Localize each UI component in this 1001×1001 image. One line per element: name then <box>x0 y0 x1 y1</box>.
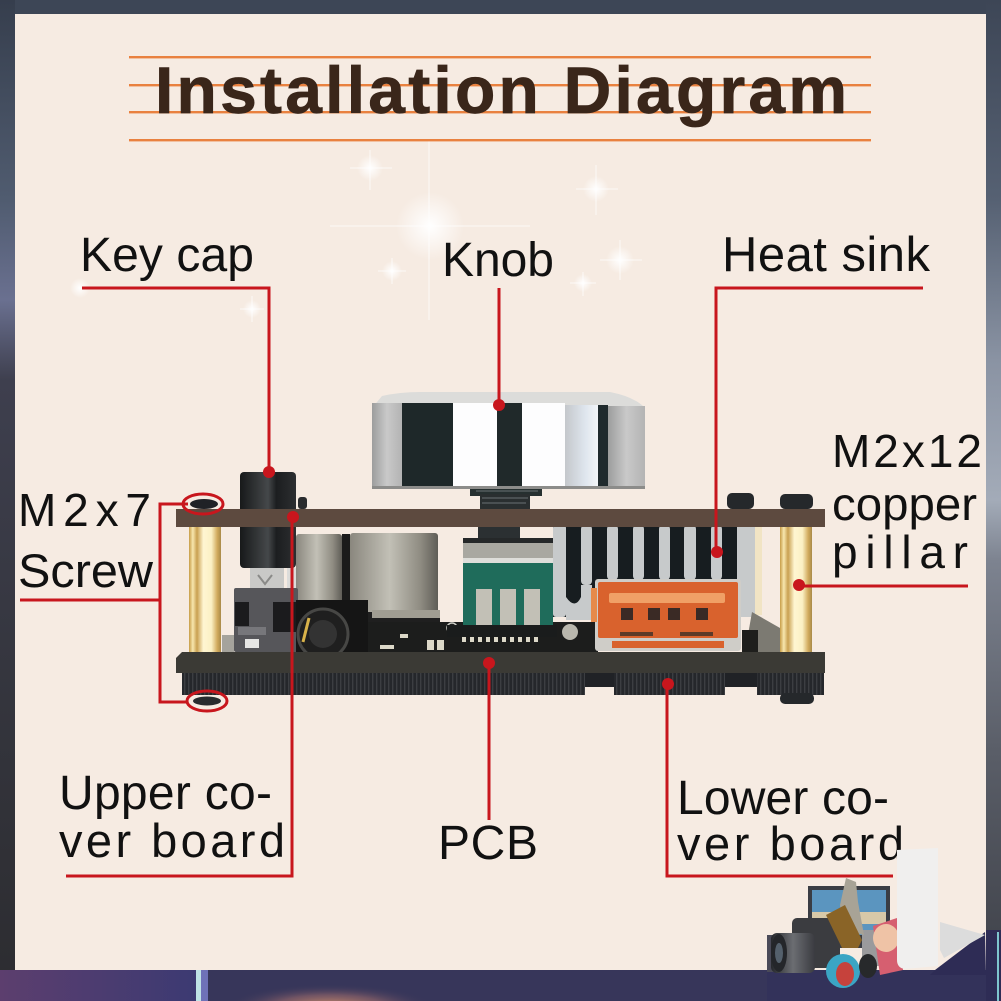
labels: ver board <box>59 814 285 867</box>
switch <box>222 588 298 652</box>
labels: Upper co- <box>59 767 272 820</box>
knob <box>372 392 645 509</box>
labels: copper <box>832 478 977 530</box>
labels: ver board <box>677 817 904 870</box>
figurines <box>826 878 864 948</box>
labels: Heat sink <box>722 228 930 282</box>
leader dots <box>263 399 805 690</box>
camera <box>771 918 840 973</box>
labels: Lower co- <box>677 772 889 825</box>
audio jack <box>296 600 368 659</box>
speaker <box>826 954 877 988</box>
phone case <box>873 917 903 975</box>
upper cover board <box>176 509 825 527</box>
right small components <box>742 612 780 652</box>
screws <box>190 493 814 706</box>
key cap <box>240 472 307 590</box>
labels: Screw <box>18 544 154 597</box>
labels: pillar <box>832 526 968 578</box>
laptop base <box>940 922 985 958</box>
sparkles <box>70 140 642 322</box>
components row <box>368 622 598 652</box>
labels: PCB <box>438 817 538 870</box>
title: Installation Diagram <box>155 53 847 127</box>
labels <box>18 228 982 870</box>
capacitors <box>296 533 440 652</box>
leader lines <box>20 288 968 876</box>
labels: M2x12 <box>832 425 982 477</box>
potentiometer <box>447 527 557 637</box>
bottom right product badge <box>767 848 986 1001</box>
right copper pillar <box>780 523 812 653</box>
labels: Knob <box>442 234 554 287</box>
labels: Key cap <box>80 229 254 282</box>
product photo <box>176 392 825 706</box>
left copper pillar <box>189 526 221 652</box>
router <box>897 848 938 969</box>
heat sink <box>553 525 762 620</box>
labels: M2x7 <box>18 484 151 536</box>
laptop screen <box>808 886 890 966</box>
USB port <box>591 579 741 651</box>
lower cover board <box>176 652 825 695</box>
